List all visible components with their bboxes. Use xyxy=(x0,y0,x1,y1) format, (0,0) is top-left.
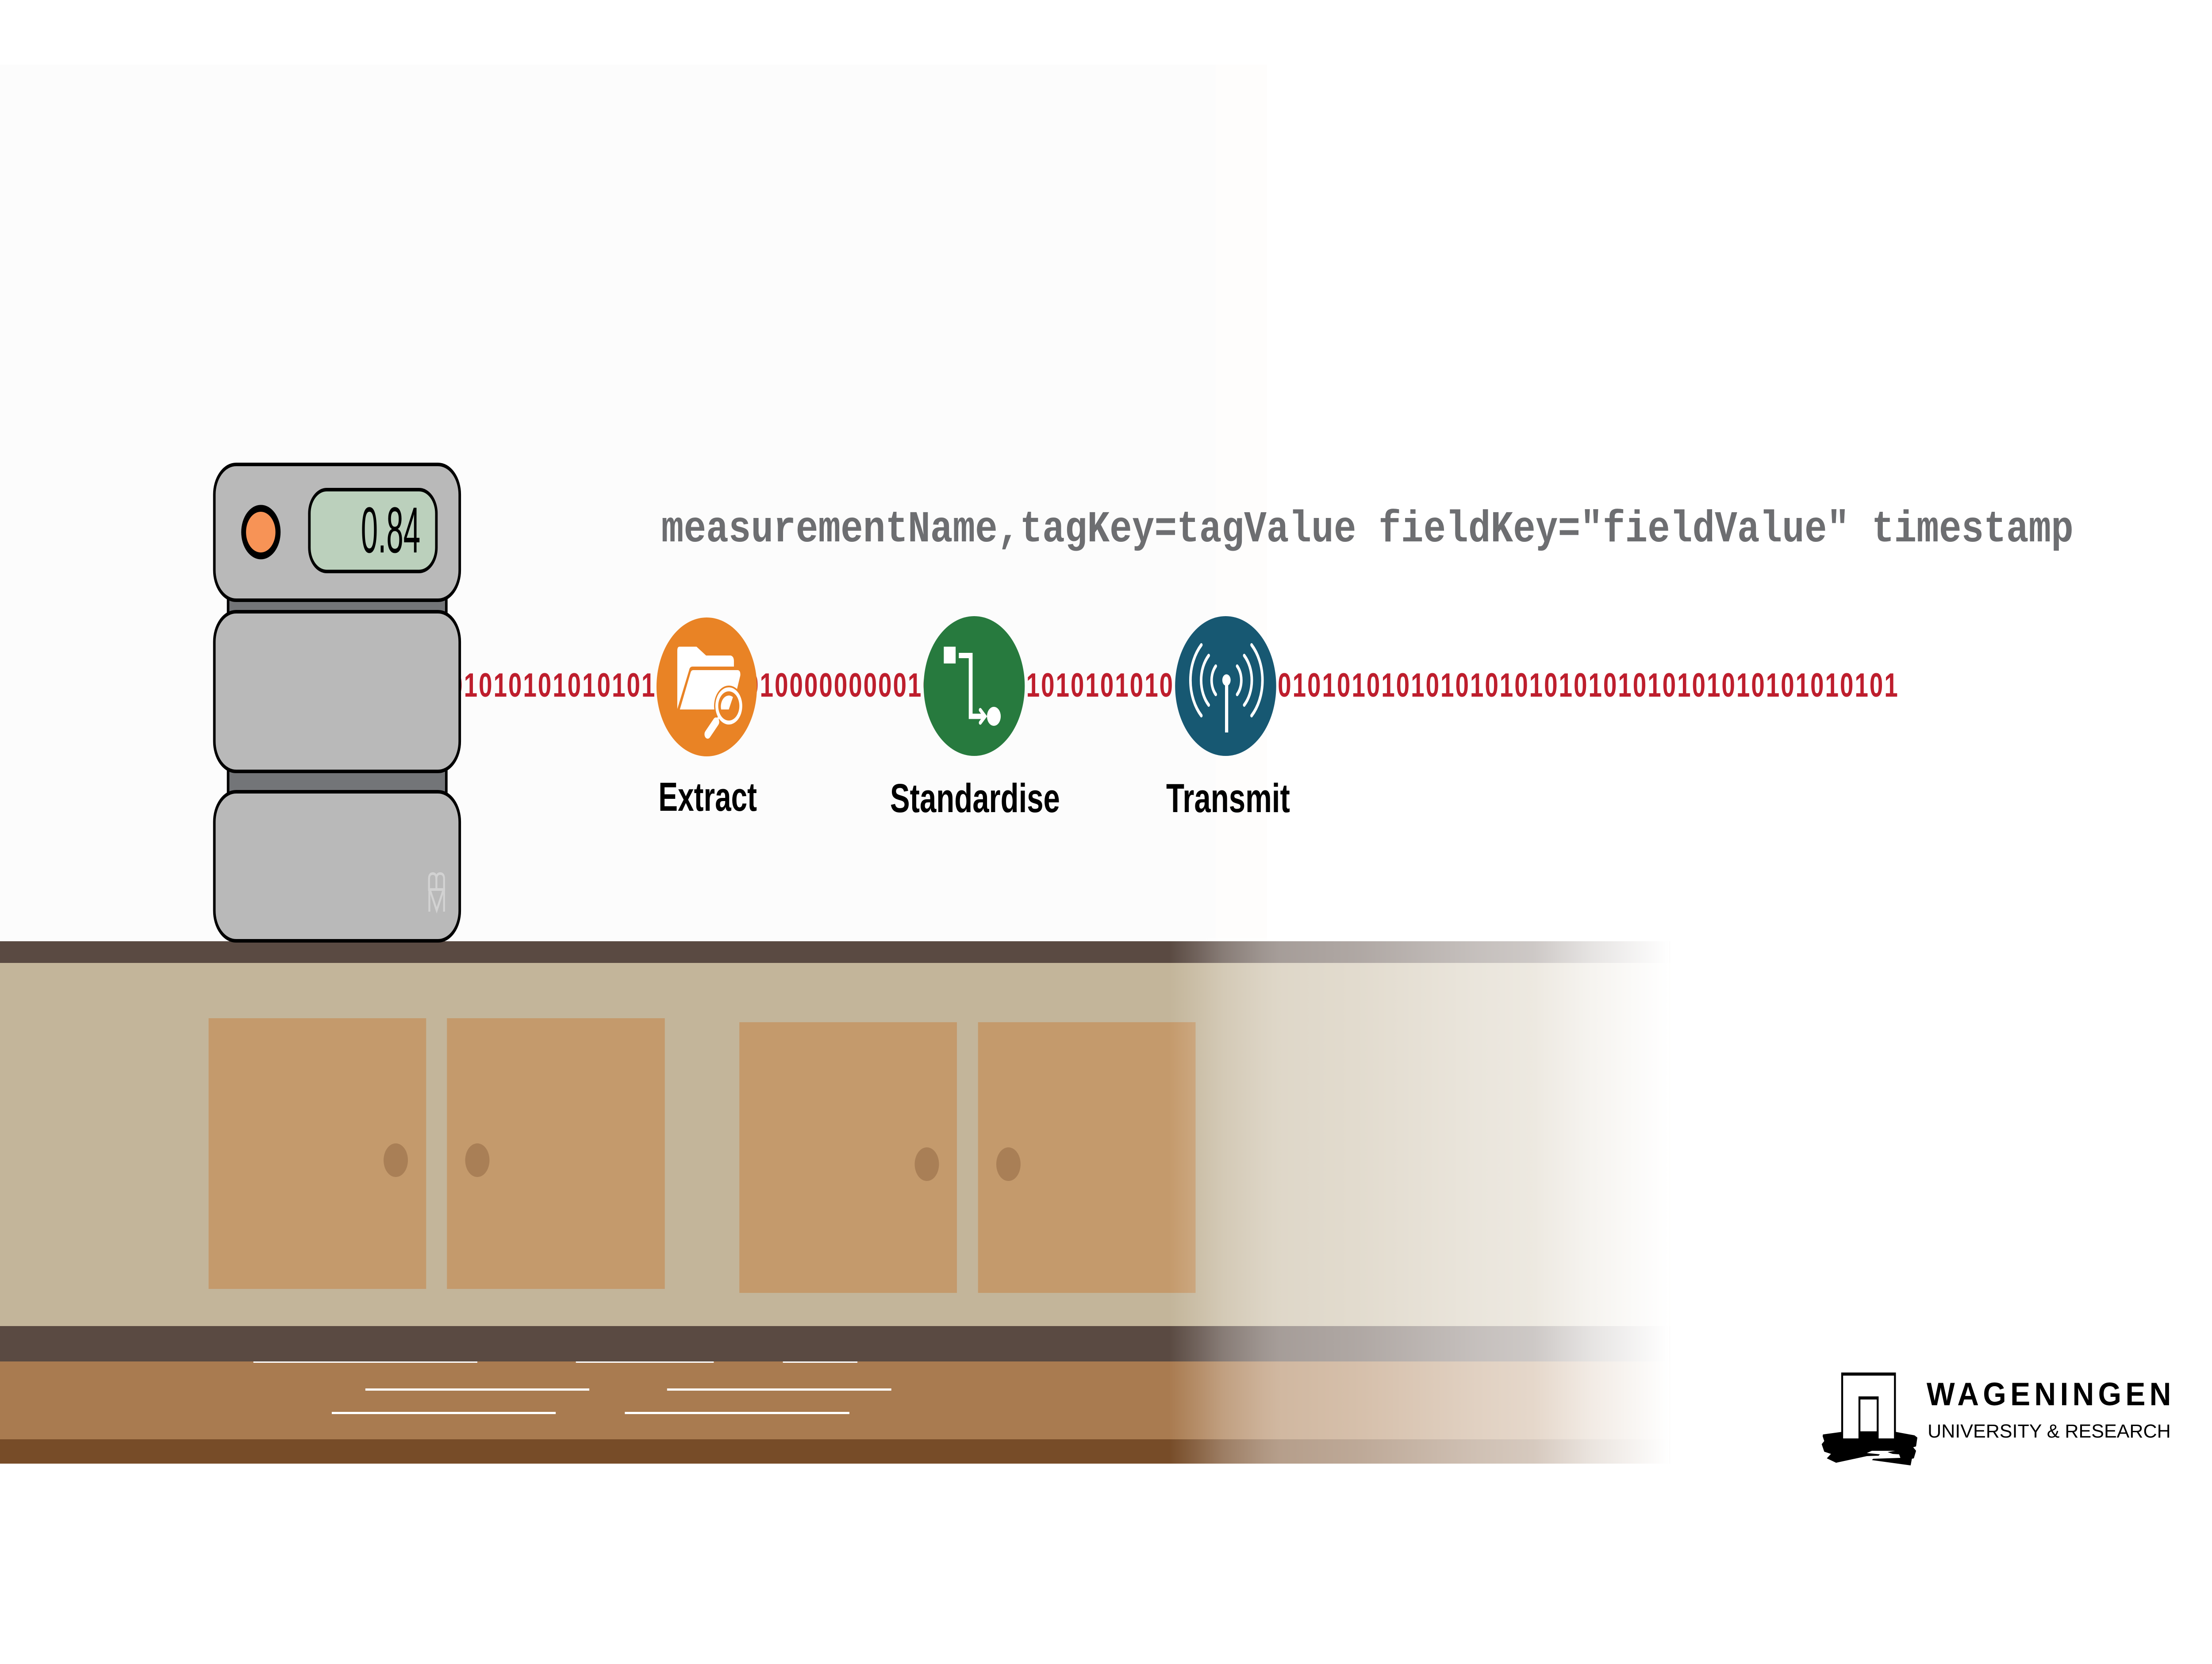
icon: folder with magnifier xyxy=(657,617,757,756)
binary data stream: 010101010101010101010101010101010101010101 xyxy=(1278,667,1899,704)
floor boards xyxy=(253,1361,891,1414)
binary data stream: 01010101010101 xyxy=(449,667,656,704)
meter top section xyxy=(215,464,460,600)
Wageningen University & Research logo xyxy=(1822,1373,2175,1465)
cabinet door 4 xyxy=(978,1022,1195,1293)
cabinet door 3 xyxy=(739,1022,957,1293)
icon: flow path xyxy=(924,616,1025,756)
orange indicator light xyxy=(241,505,280,559)
gas meter xyxy=(215,464,460,941)
label: Transmit: Transmit xyxy=(1166,775,1290,821)
label: Extract: Extract xyxy=(658,774,757,820)
cabinet fade to white xyxy=(1169,938,1670,1466)
door knobs xyxy=(384,1143,1021,1181)
logo wordmark: WAGENINGEN xyxy=(1927,1376,2175,1412)
meter reading: 0.84 xyxy=(361,494,420,567)
cabinet door 2 xyxy=(447,1018,665,1289)
panel: room background xyxy=(0,65,1267,941)
icon: antenna xyxy=(1175,616,1276,756)
cabinet door 1 xyxy=(209,1018,426,1289)
meter bottom section xyxy=(215,792,460,941)
panel: kitchen cabinet xyxy=(0,938,1670,1466)
logo subline: UNIVERSITY & RESEARCH xyxy=(1928,1420,2171,1442)
step: transmit xyxy=(1166,616,1290,821)
binary data stream: 0100000000010 xyxy=(745,667,937,704)
line protocol format text: measurementName,tagKey=tagValue fieldKey="fieldValue" timestamp xyxy=(661,505,2074,555)
step: standardise xyxy=(890,616,1060,821)
step: extract xyxy=(657,617,757,820)
label: Standardise: Standardise xyxy=(890,775,1060,821)
binary data stream: 1010101010 xyxy=(1026,667,1174,704)
meter middle section xyxy=(215,612,460,771)
lcd display xyxy=(309,490,436,571)
binary data stream xyxy=(449,667,1899,704)
meter maker logo xyxy=(428,874,445,912)
meter connectors xyxy=(228,593,446,798)
logo mark xyxy=(1822,1373,1917,1465)
